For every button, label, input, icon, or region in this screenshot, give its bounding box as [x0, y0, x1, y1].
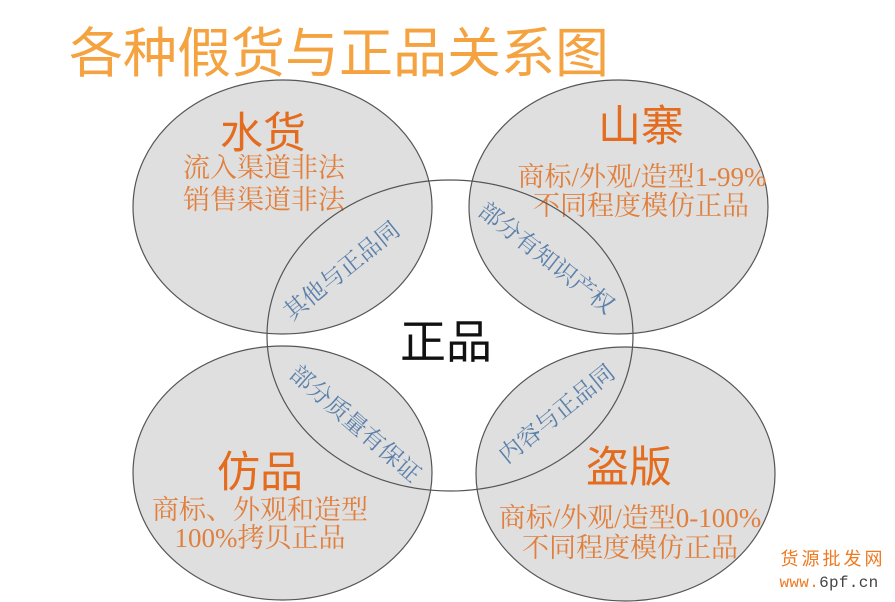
text: 水货 description: 销售渠道非法 [183, 185, 346, 215]
heading: 仿品: 仿品 [217, 449, 303, 497]
overlap label: 内容与正品同: 内容与正品同 [494, 359, 620, 469]
text: 盗版 description [499, 503, 761, 563]
text: 仿品 description: 100%拷贝正品 [174, 523, 346, 553]
circle: 仿品 [133, 346, 432, 600]
text: 仿品 description [152, 495, 368, 553]
text: 山寨 description: 商标/外观/造型1-99% [518, 162, 766, 192]
circle: 水货 [133, 80, 432, 334]
circle: 盗版 [476, 347, 775, 601]
overlap label: 部分有知识产权: 部分有知识产权 [473, 197, 620, 320]
center label: 正品: 正品 [400, 316, 492, 368]
circle: 山寨 [469, 80, 768, 334]
text: 山寨 description: 不同程度模仿正品 [533, 191, 749, 221]
watermark [779, 549, 886, 592]
watermark: www.6pf.cn [779, 574, 879, 592]
title: 各种假货与正品关系图 [69, 24, 609, 84]
text: 盗版 description: 商标/外观/造型0-100% [499, 503, 761, 533]
overlap label: 部分质量有保证: 部分质量有保证 [284, 360, 426, 488]
heading: 盗版: 盗版 [586, 444, 672, 492]
heading: 山寨: 山寨 [598, 103, 684, 151]
text: 仿品 description: 商标、外观和造型 [152, 495, 368, 525]
heading: 水货: 水货 [220, 110, 306, 158]
text: 盗版 description: 不同程度模仿正品 [522, 533, 738, 563]
text: 水货 description [183, 153, 346, 215]
watermark: 货源批发网 [780, 549, 886, 569]
overlap label: 其他与正品同: 其他与正品同 [279, 216, 405, 326]
text: 山寨 description [518, 162, 766, 221]
text: 水货 description: 流入渠道非法 [183, 153, 346, 183]
circle: 正品 outline [267, 180, 633, 491]
